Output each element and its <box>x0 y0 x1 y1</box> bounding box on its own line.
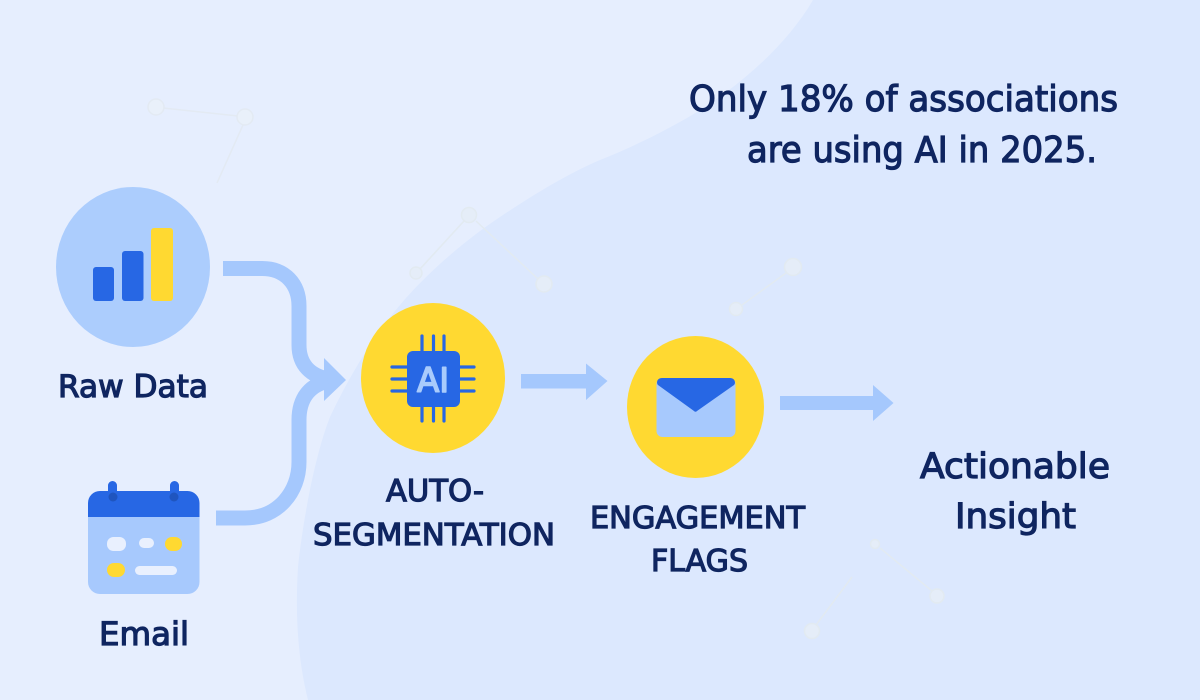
label: engagement flags: ENGAGEMENT <box>590 501 806 536</box>
background curved panel <box>297 0 1200 700</box>
headline: are using AI in 2025. <box>747 130 1097 171</box>
label: auto-segmentation: AUTO- <box>386 474 484 509</box>
label: engagement flags <box>590 501 806 579</box>
decorative network: right <box>730 258 802 316</box>
arrow: engagement to insight <box>780 385 894 421</box>
icon: email calendar <box>88 481 200 594</box>
decorative network: centre <box>410 208 552 292</box>
decorative network: top left <box>148 99 253 183</box>
label: actionable insight: Insight <box>955 497 1076 537</box>
headline <box>689 79 1118 171</box>
icon: engagement envelope <box>627 336 764 478</box>
icon: raw data bar chart <box>56 187 210 347</box>
label: auto-segmentation: SEGMENTATION <box>313 518 555 553</box>
arrow: raw data to auto-segmentation <box>223 268 346 401</box>
arrow: segmentation to engagement <box>521 364 608 400</box>
headline: Only 18% of associations <box>689 79 1118 120</box>
label: raw data: Raw Data <box>58 369 208 405</box>
icon: AI chip: AI <box>417 361 449 401</box>
arrow: email to auto-segmentation <box>216 381 328 518</box>
label: actionable insight: Actionable <box>920 447 1110 487</box>
label: auto-segmentation <box>313 474 555 553</box>
label: email: Email <box>99 615 189 653</box>
decorative network: bottom right <box>804 540 944 638</box>
label: engagement flags: FLAGS <box>651 544 748 579</box>
label: actionable insight <box>920 447 1110 537</box>
icon: AI chip <box>361 303 505 453</box>
